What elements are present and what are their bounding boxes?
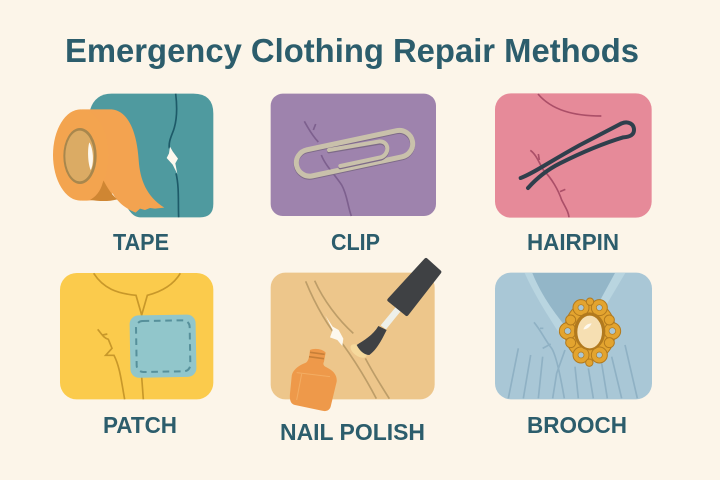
fabric card (271, 94, 436, 216)
label: hairpin: HAIRPIN (527, 229, 619, 255)
fabric card (495, 93, 652, 218)
panel: clip (271, 94, 436, 216)
fabric card (90, 94, 213, 217)
fabric crack (304, 121, 351, 216)
panel: patch (60, 273, 213, 399)
panel: brooch (495, 273, 652, 399)
icon: polish bottle (290, 349, 337, 411)
neckline (525, 273, 625, 347)
polish dab (348, 342, 369, 360)
fabric tear (167, 94, 179, 217)
fabric card (271, 273, 435, 399)
icon: fabric patch (129, 314, 197, 378)
fabric crack (530, 150, 569, 217)
icon: tape roll (53, 109, 164, 213)
fabric card (495, 273, 652, 399)
collar seam (538, 94, 601, 116)
icon: hairpin (521, 122, 634, 188)
label: tape: TAPE (113, 229, 169, 255)
label: clip: CLIP (331, 229, 380, 255)
panel: hairpin (495, 93, 652, 218)
label: brooch: BROOCH (527, 412, 627, 438)
icon: paper clip (294, 128, 415, 180)
icon: polish brush (357, 260, 439, 355)
garment seams (306, 281, 389, 399)
panel: nail polish (271, 260, 439, 411)
label: patch: PATCH (103, 412, 177, 438)
title: Emergency Clothing Repair Methods (65, 32, 639, 69)
panel: tape (53, 94, 213, 217)
shirt collar and seams (94, 273, 180, 399)
fabric card (60, 273, 213, 399)
fabric tear (325, 315, 343, 346)
icon: brooch (559, 298, 621, 366)
label: nail polish: NAIL POLISH (280, 419, 425, 445)
knit folds and crack (508, 322, 637, 398)
